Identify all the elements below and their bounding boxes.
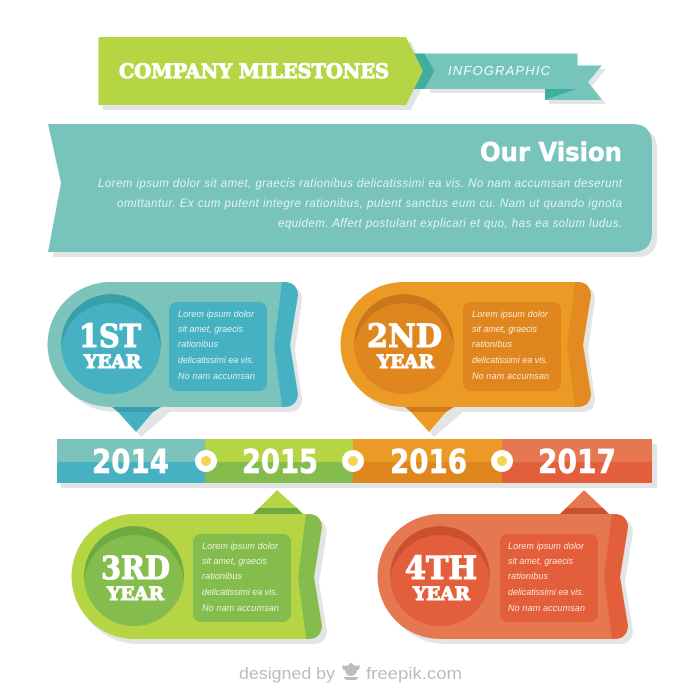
pointer [560,490,609,514]
icon: freepik mascot [342,663,360,680]
green title plate [98,37,423,105]
card: 2nd year: YEAR [376,351,434,373]
card shadow [53,287,302,437]
card body [48,282,298,407]
card text: delicatissimi ea vis. [178,355,254,365]
credit text right: freepik.com [366,665,462,683]
card shadow [76,519,327,644]
card text: rationibus [472,339,512,349]
dot 3 [491,450,513,472]
card text: rationibus [202,571,242,581]
card text [178,309,255,381]
card text: rationibus [178,339,218,349]
segment 2017 [502,439,652,483]
segment 2016 [353,439,502,483]
dot 1 [195,450,217,472]
ribbon: infographic [414,54,602,100]
infographic text: INFOGRAPHIC [448,63,551,78]
vision heading: Our Vision [480,138,622,168]
card text: No nam accumsan [202,603,279,613]
card shadow [346,287,595,437]
card body [72,514,322,639]
badge text: 1ST [79,317,141,355]
side band [567,282,591,407]
title text: COMPANY MILESTONES [119,59,389,83]
card text: sit amet, graecis [508,556,574,566]
vision text: Lorem ipsum dolor sit amet, graecis rationibus delicatissimi ea vis. No nam accumsan deserunt [98,178,623,190]
text box [463,302,561,391]
card: 3rd year: YEAR [106,583,164,605]
pointer band [253,508,303,514]
card: 4th year: YEAR [412,583,470,605]
badge text: 3RD [101,549,170,587]
vision text [98,178,623,230]
card body [341,282,591,407]
vision text: equidem. Affert postulant explicari et quo, has ea solum ludus. [278,218,622,230]
segment 2015 [205,439,353,483]
card text: delicatissimi ea vis. [472,355,548,365]
card text: No nam accumsan [178,371,255,381]
timeline [57,439,657,488]
badge text: 4TH [405,549,477,587]
pointer [405,407,454,432]
banner shadows [103,42,606,110]
timeline shadow [61,444,657,488]
pointer [112,407,161,432]
year badge [390,526,490,635]
year badge [84,526,184,635]
badge text: 2ND [367,317,442,355]
card: 4th year [378,490,633,644]
text box [500,534,598,622]
text box [193,534,291,622]
card text [508,541,585,613]
title banner [98,37,606,110]
side band [274,282,298,407]
card text: rationibus [508,571,548,581]
card shadow [383,519,633,644]
ribbon dark notch [414,54,434,89]
card text: Lorem ipsum dolor [202,541,279,551]
pointer band [405,407,454,412]
card text: sit amet, graecis [178,324,244,334]
vision text: omittantur. Ex cum putent integre rationibus, putent sanctus eum cu. Nam ut quando ignota [117,198,622,210]
credit text left: designed by [239,665,336,683]
card: 1st year [48,282,302,437]
card text: Lorem ipsum dolor [508,541,585,551]
year badge [354,294,454,403]
year 2017: 2017 [538,442,616,481]
year 2015: 2015 [242,442,318,481]
card: 3rd year [72,490,327,644]
pointer band [112,407,161,412]
text box [169,302,267,391]
card text: delicatissimi ea vis. [202,587,278,597]
year 2016: 2016 [390,442,467,481]
card text: sit amet, graecis [202,556,268,566]
ribbon fold [545,89,576,100]
segment 2014 [57,439,205,483]
year badge [61,294,161,403]
vision panel shape [48,124,652,252]
card body [378,514,628,639]
card text [472,309,549,381]
pointer band [560,508,609,514]
card text: Lorem ipsum dolor [472,309,549,319]
card: 2nd year [341,282,595,437]
side band [604,514,628,639]
side band [298,514,322,639]
footer credit [239,663,462,683]
year 2014: 2014 [92,442,169,481]
dot 2 [342,450,364,472]
card text [202,541,279,613]
pointer [253,490,303,514]
card text: No nam accumsan [508,603,585,613]
card text: Lorem ipsum dolor [178,309,255,319]
card text: No nam accumsan [472,371,549,381]
vision shadow [53,129,657,257]
card text: delicatissimi ea vis. [508,587,584,597]
panel: our vision [48,124,657,257]
card text: sit amet, graecis [472,324,538,334]
card: 1st year: YEAR [83,351,141,373]
